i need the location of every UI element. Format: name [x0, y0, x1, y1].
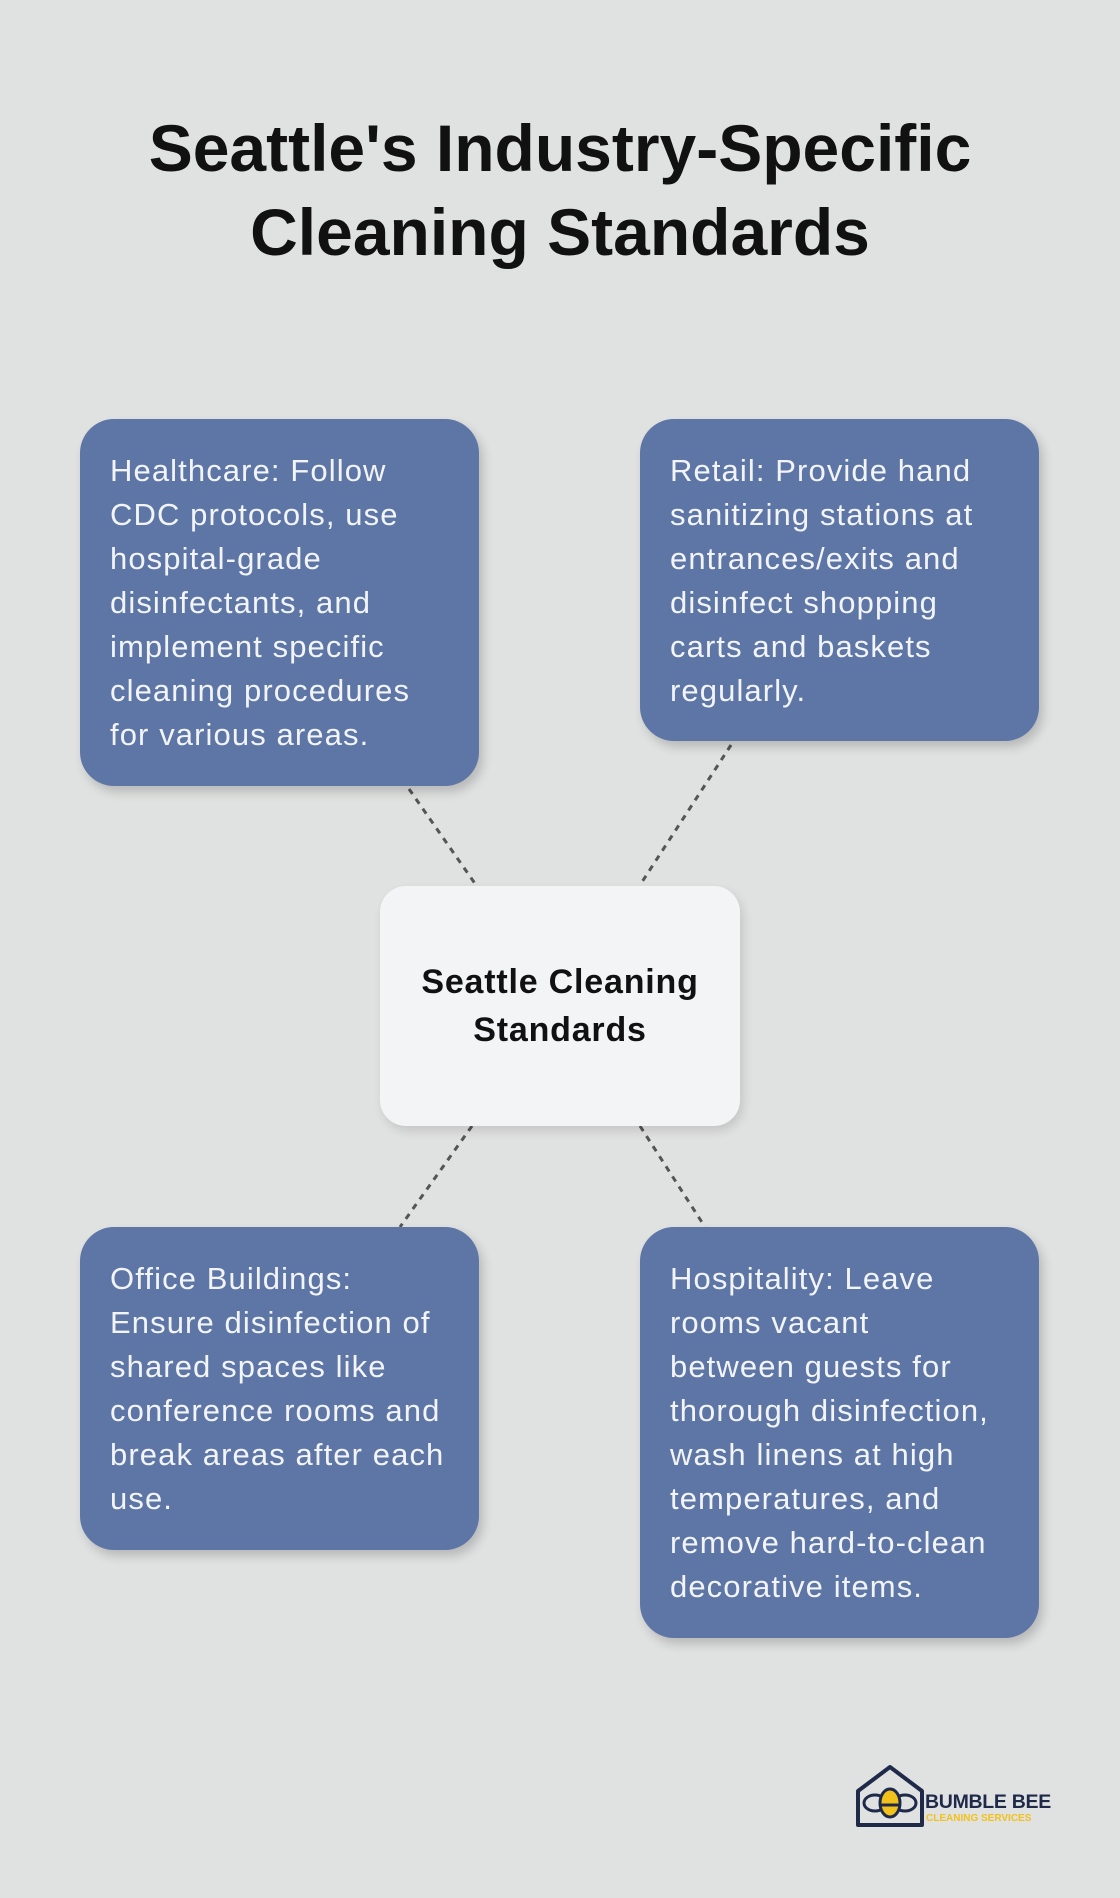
panel: healthcare: cleaning procedures — [110, 673, 410, 708]
panel: hospitality: rooms vacant — [670, 1305, 869, 1340]
panel: retail: sanitizing stations at — [670, 497, 973, 532]
panel: hospitality: decorative items. — [670, 1569, 923, 1604]
title: Cleaning Standards — [250, 195, 870, 269]
logo: CLEANING SERVICES — [926, 1813, 1031, 1824]
panel: healthcare: disinfectants, and — [110, 585, 371, 620]
panel: hospitality: between guests for — [670, 1349, 952, 1384]
logo text: BUMBLE BEE — [925, 1791, 1051, 1813]
panel: hospitality: Hospitality: Leave — [670, 1261, 934, 1296]
logo — [856, 1765, 1051, 1827]
panel: hospitality: thorough disinfection, — [670, 1393, 989, 1428]
title: Seattle's Industry-Specific — [149, 111, 971, 185]
panel: office buildings: Office Buildings: — [110, 1261, 352, 1296]
panel: office buildings: Ensure disinfection of — [110, 1305, 431, 1340]
panel: retail — [640, 419, 1039, 741]
center node: Standards — [473, 1011, 647, 1049]
panel: healthcare: Healthcare: Follow — [110, 453, 387, 488]
panel: hospitality: remove hard-to-clean — [670, 1525, 987, 1560]
icon: bee house — [856, 1765, 924, 1827]
center node: Seattle Cleaning — [421, 963, 699, 1001]
panel: retail: entrances/exits and — [670, 541, 960, 576]
panel: retail: carts and baskets — [670, 629, 932, 664]
panel: office buildings: conference rooms and — [110, 1393, 440, 1428]
panel: hospitality — [640, 1227, 1039, 1638]
title — [149, 111, 971, 269]
panel: hospitality: wash linens at high — [670, 1437, 955, 1472]
panel: office buildings: use. — [110, 1481, 173, 1516]
panel: healthcare: implement specific — [110, 629, 385, 664]
panel: hospitality: temperatures, and — [670, 1481, 940, 1516]
panel: retail: Retail: Provide hand — [670, 453, 971, 488]
panel: retail: regularly. — [670, 673, 806, 708]
panel: office buildings — [80, 1227, 479, 1550]
panel: office buildings: shared spaces like — [110, 1349, 387, 1384]
panel: healthcare: hospital-grade — [110, 541, 322, 576]
panel: healthcare: CDC protocols, use — [110, 497, 399, 532]
panel: retail: disinfect shopping — [670, 585, 938, 620]
center node — [380, 886, 740, 1126]
panel: healthcare — [80, 419, 479, 786]
panel: office buildings: break areas after each — [110, 1437, 444, 1472]
panel: healthcare: for various areas. — [110, 717, 369, 752]
